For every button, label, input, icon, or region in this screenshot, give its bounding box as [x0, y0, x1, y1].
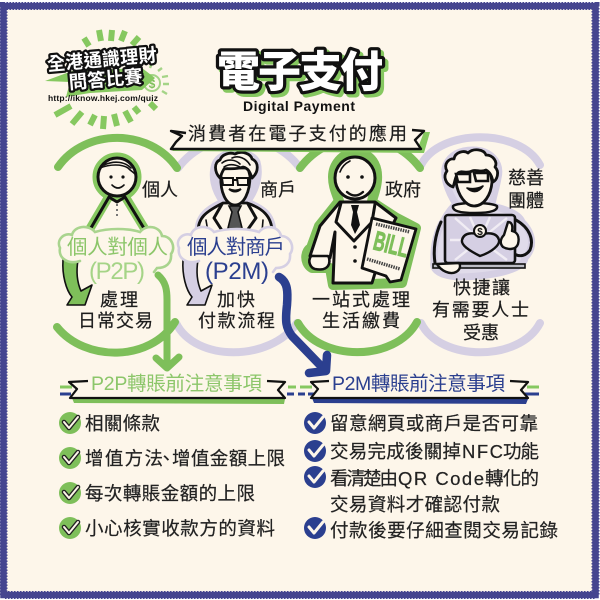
text: speed up payment [198, 290, 275, 331]
item: NFC off: 交易完成後關掉 [330, 441, 461, 462]
item: NFC off [304, 440, 539, 462]
text: one stop bills: 一站式處理 [312, 290, 410, 310]
figure: government [306, 153, 416, 285]
logo: quiz badge: 問答比賽 [68, 66, 144, 93]
cloud: P2M: (P2M) [205, 258, 269, 285]
item: trust site: 留意網頁或商戶是否可靠 [330, 413, 538, 434]
text: benefit those in need: 快捷讓 [453, 278, 510, 298]
label: individual: 個人 [142, 180, 178, 200]
text: everyday transactions: 處理 [100, 290, 138, 310]
figure: individual [88, 157, 146, 233]
label: government: 政府 [385, 180, 421, 200]
item: QR code: 交易資料才確認付款 [330, 494, 500, 515]
label: merchant: 商戶 [260, 180, 296, 200]
item: NFC off: NFC [462, 441, 503, 462]
top banner: 消費者在電子支付的應用 [188, 123, 407, 144]
icon: hand [309, 256, 329, 269]
icon: dollar coin: $ [149, 77, 156, 91]
item: QR code: 轉化的 [485, 468, 539, 489]
dashed connector lines [60, 387, 539, 394]
item: top-up [59, 447, 285, 469]
logo: quiz badge: 全港通識理財 [46, 44, 158, 75]
item: top-up: 、 [157, 448, 176, 469]
item: verify payee: 小心核實收款方的資料 [85, 518, 275, 539]
label: charity: 團體 [508, 191, 544, 211]
figure: merchant [198, 152, 273, 232]
top banner [170, 123, 430, 153]
label: charity: 慈善 [508, 168, 544, 188]
title: 電子支付 [220, 52, 386, 100]
subtitle: Digital Payment [243, 98, 355, 114]
logo: quiz badge: http://iknow.hkej.com/quiz [48, 93, 158, 103]
text: speed up payment: 加快 [217, 290, 255, 310]
cloud: P2P: (P2P) [89, 258, 145, 285]
icon: laptop [433, 215, 525, 268]
cloud: P2M [178, 227, 292, 285]
cloud: P2P [59, 227, 173, 285]
text: benefit those in need: 有需要人士 [432, 300, 529, 320]
arrow: to P2M notes [279, 277, 327, 373]
item: top-up: 增值金額上限 [172, 448, 285, 469]
title: 電子支付 [217, 49, 383, 97]
P2M checklist [304, 412, 558, 541]
cloud: P2M: 個人對商戶 [187, 236, 285, 259]
item: terms: 相關條款 [85, 413, 160, 434]
arrow: P2P flow curved [63, 260, 92, 305]
arrow: to P2P notes [156, 275, 179, 368]
top and bottom arcs [57, 137, 540, 353]
item: top-up: 增值方法 [85, 448, 163, 469]
banner: P2P notes: P2P轉賬前注意事項 [91, 373, 262, 395]
text: everyday transactions [78, 290, 153, 331]
banner: P2P notes [69, 373, 285, 404]
item: check records: 付款後要仔細查閱交易記錄 [330, 520, 558, 541]
text: one stop bills: 生活繳費 [322, 311, 400, 331]
icon: thumbs up [501, 222, 519, 249]
label: charity [508, 168, 544, 211]
text: benefit those in need [432, 278, 529, 343]
item: transfer limit: 每次轉賬金額的上限 [85, 483, 255, 504]
banner: P2M notes: P2M轉賬前注意事項 [332, 373, 505, 395]
banner: P2M notes [311, 373, 528, 404]
logo: quiz badge [45, 30, 169, 129]
P2P checklist [59, 412, 285, 539]
item: QR code: QR Code [398, 468, 484, 489]
icon: heart and coin: $ [477, 227, 483, 238]
icon: bill document: BILL [371, 226, 412, 263]
item: NFC off: 功能 [503, 441, 539, 462]
item: QR code [304, 466, 539, 515]
text: benefit those in need: 受惠 [463, 323, 499, 343]
item: QR code: 看清楚由 [330, 468, 398, 489]
figure: charity [433, 150, 532, 277]
text: everyday transactions: 日常交易 [78, 311, 153, 331]
cloud: P2P: 個人對個人 [67, 236, 168, 259]
arrow: P2M flow curved [183, 260, 212, 305]
text: one stop bills [312, 290, 410, 331]
text: speed up payment: 付款流程 [198, 311, 275, 331]
